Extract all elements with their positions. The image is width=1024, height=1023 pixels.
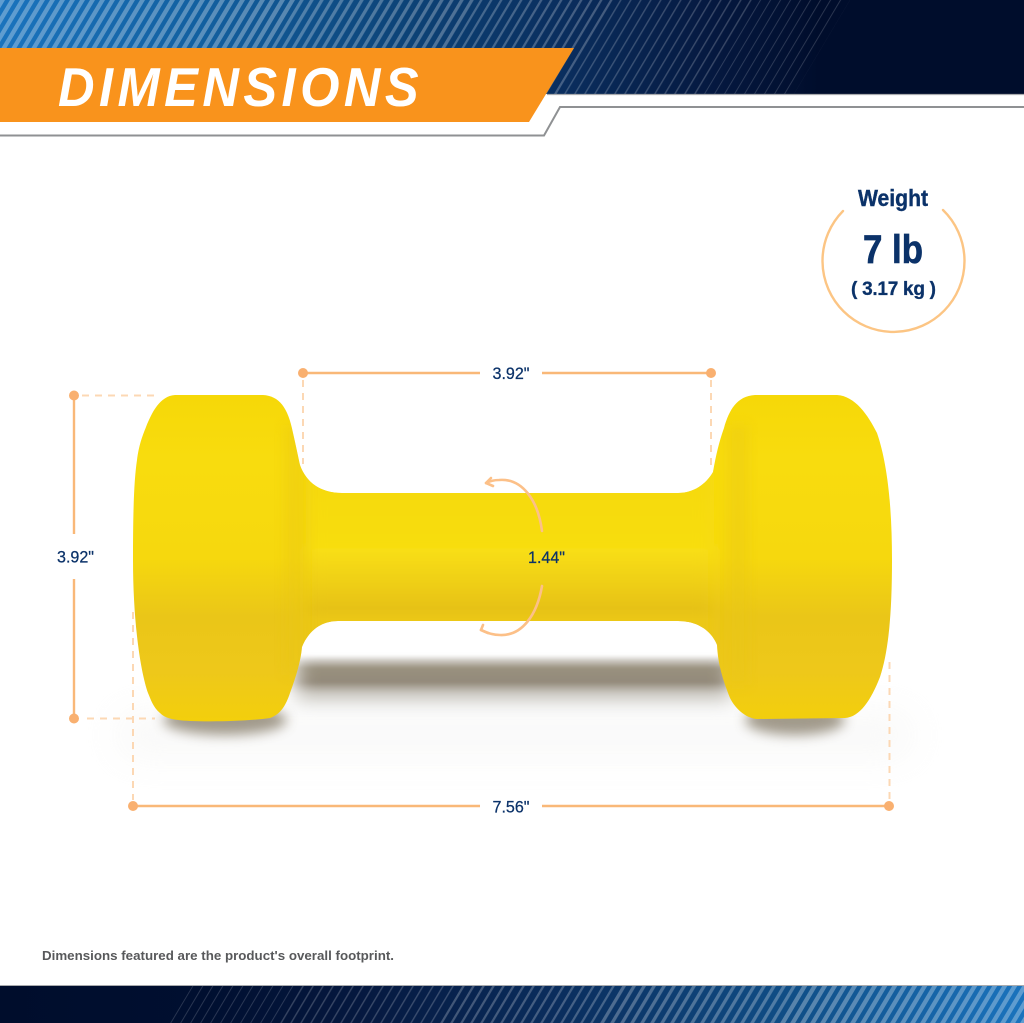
left dimension value: 3.92" bbox=[57, 548, 94, 566]
header gray rule lines bbox=[0, 94, 1024, 136]
weight pounds: 7 lb bbox=[863, 228, 923, 272]
dashed extension lines bbox=[82, 380, 890, 800]
bottom dimension value: 7.56" bbox=[492, 798, 530, 816]
top header band bbox=[0, 0, 1024, 94]
orange title banner bbox=[0, 48, 574, 122]
weight badge bbox=[823, 185, 965, 332]
handle circumference value: 1.44" bbox=[528, 548, 565, 567]
weight circle arc bbox=[823, 210, 965, 332]
top dimension value: 3.92" bbox=[492, 364, 530, 383]
weight kilograms: ( 3.17 kg ) bbox=[851, 279, 936, 300]
footnote: Dimensions featured are the product's overall footprint. bbox=[42, 948, 394, 963]
bottom overall-length dimension bbox=[128, 798, 894, 816]
top handle-length dimension bbox=[298, 364, 716, 383]
left height dimension bbox=[57, 390, 94, 724]
dumbbell shadows bbox=[120, 655, 910, 755]
dumbbell bbox=[120, 385, 900, 730]
weight label: Weight bbox=[858, 185, 928, 211]
handle circumference arrows bbox=[481, 478, 542, 635]
title: DIMENSIONS bbox=[58, 57, 419, 118]
bottom footer band bbox=[0, 985, 1024, 1023]
